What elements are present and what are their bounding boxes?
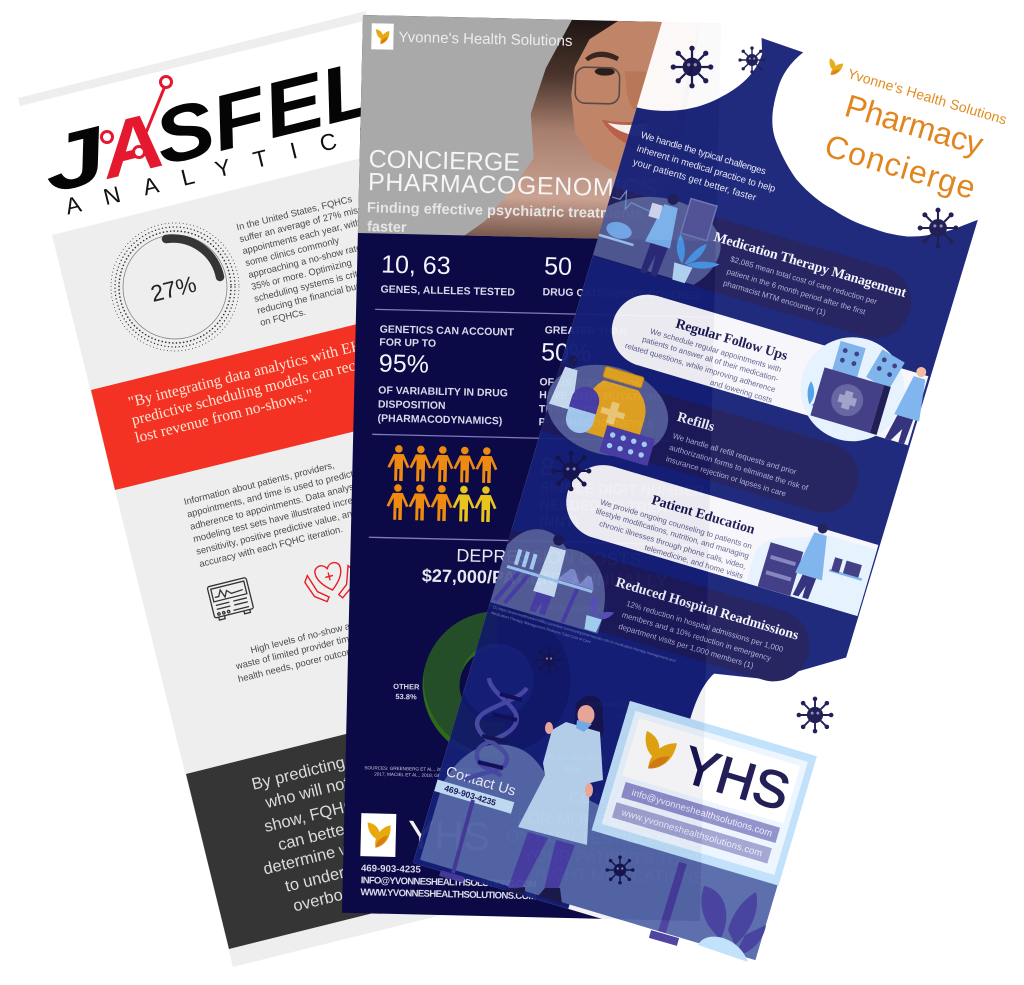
description: (PHARMACODYNAMICS) bbox=[377, 412, 503, 427]
panel: refills bbox=[535, 351, 870, 527]
sign frame bbox=[592, 701, 817, 886]
doctor head bbox=[567, 354, 579, 367]
icon: DNA helix bbox=[465, 678, 527, 780]
plant pot bbox=[669, 262, 692, 284]
yellow people bbox=[452, 485, 497, 522]
donut ghost bbox=[429, 612, 566, 749]
blue background shape bbox=[413, 10, 1010, 965]
phone number: 469-903-4235 bbox=[443, 783, 497, 808]
table top bbox=[507, 566, 592, 592]
label: DRUG CATEGORIES COVERED bbox=[542, 286, 700, 302]
value: 8 bbox=[540, 453, 555, 482]
lead: FOR UP TO bbox=[379, 336, 436, 350]
cabinet drawers bbox=[766, 557, 795, 580]
subtitle: faster bbox=[367, 219, 407, 236]
pill background bbox=[541, 363, 867, 521]
eye bbox=[595, 67, 615, 76]
intro paragraph: on FQHCs. bbox=[259, 306, 307, 328]
call to action: RIGHT MEDICATIONS bbox=[535, 865, 705, 887]
blob bbox=[593, 183, 730, 289]
heading: Regular Follow Ups bbox=[674, 317, 790, 364]
intro text: We handle the typical challenges bbox=[639, 130, 767, 177]
description: We handle all refill requests and prior bbox=[672, 431, 798, 477]
cabinet bbox=[758, 542, 803, 596]
flyer: Concierge Pharmacogenomics bbox=[342, 15, 755, 922]
lead: GREATER THAN bbox=[545, 324, 627, 338]
bottle body bbox=[579, 377, 652, 447]
icon: heart in hands bbox=[302, 558, 359, 606]
teeth bbox=[608, 122, 646, 136]
progress arc bbox=[166, 238, 220, 277]
stat: single digit NNT bbox=[539, 453, 706, 534]
illustration: lab bbox=[490, 521, 631, 637]
sign inner panel bbox=[602, 711, 808, 875]
blister pack left bbox=[832, 341, 866, 379]
illustration: consulting doctor bbox=[746, 507, 880, 616]
board bbox=[681, 199, 717, 241]
doctor head bbox=[552, 533, 565, 547]
doctor coat bbox=[533, 545, 568, 597]
doctor legs bbox=[885, 411, 914, 445]
description: patients to answer all of their medication- bbox=[641, 335, 780, 384]
bar bbox=[434, 779, 514, 814]
description: members and a 10% reduction in emergency bbox=[621, 610, 772, 663]
plant leaves bbox=[672, 234, 725, 274]
description: HAVE GENE MUTATIONS bbox=[539, 389, 664, 404]
icon: virus left bbox=[535, 646, 563, 674]
sign logo area bbox=[622, 718, 800, 823]
donut chart bbox=[440, 629, 553, 742]
donut labels: hidden segments: PHARMACEUTICALS bbox=[586, 699, 662, 710]
description: 12% reduction in hospital admissions per 1,000 bbox=[625, 599, 785, 654]
data paragraph: adherence to appointments. Data analysis bbox=[189, 479, 362, 532]
value: 50 bbox=[544, 252, 572, 281]
icon: virus mid left bbox=[551, 451, 591, 491]
mouth bbox=[602, 120, 632, 144]
flyer gray body bbox=[52, 136, 450, 967]
donut labels: hidden segments: 16% bbox=[616, 711, 632, 720]
doctor legs bbox=[793, 572, 817, 600]
footer logo badge bbox=[360, 813, 396, 857]
panel: patient education bbox=[557, 451, 880, 616]
main title: PHARMACOGENOMICS bbox=[368, 168, 657, 203]
doctor head bbox=[915, 366, 927, 378]
sign YHS: YHS bbox=[676, 736, 796, 822]
doctor coat bbox=[549, 365, 583, 410]
intro paragraph: some clinics commonly bbox=[244, 234, 341, 268]
label: GENES, ALLELES TESTED bbox=[380, 283, 515, 299]
dotted ring bbox=[111, 223, 239, 351]
logo letters SFEL: SFEL bbox=[145, 43, 384, 182]
description: We schedule regular appointments with bbox=[649, 327, 782, 374]
sources: 2017; MACIEL ET AL., 2018; GROUP bbox=[374, 771, 451, 778]
stand pole bbox=[453, 800, 473, 873]
blister pack bbox=[599, 425, 655, 466]
donut label: other: OTHER bbox=[393, 682, 420, 692]
illustration: doctor at desk bbox=[592, 176, 735, 293]
intro paragraph: 35% or more. Optimizing bbox=[250, 257, 353, 292]
data paragraph: appointments, and time is used to predict bbox=[186, 468, 355, 519]
call to action: YOUR PATIENTS TO THE bbox=[523, 847, 718, 870]
photo: woman portrait bbox=[464, 20, 662, 239]
plant bottom right bbox=[698, 886, 766, 962]
description: related questions, while improving adherence bbox=[624, 341, 776, 394]
closing statement: can better bbox=[276, 819, 352, 854]
intro paragraph: approaching a no-show rate of bbox=[247, 239, 373, 280]
description: and lowering costs bbox=[709, 378, 773, 405]
doctor head bbox=[666, 193, 680, 206]
hill bbox=[420, 730, 794, 960]
pill background bbox=[491, 530, 818, 690]
bottle cap bbox=[603, 366, 644, 388]
left leg bbox=[508, 832, 548, 888]
value: 10, 63 bbox=[381, 250, 451, 280]
intro paragraph: scheduling systems is critical to bbox=[253, 262, 382, 304]
heading: Medication Therapy Management bbox=[712, 230, 908, 301]
capsule lower half bbox=[562, 406, 596, 436]
other segment bbox=[440, 629, 511, 741]
box emblem bbox=[827, 380, 867, 420]
footnote: Medication Therapy Management Reduces Total Cost of Care bbox=[491, 611, 591, 644]
brand row bbox=[825, 58, 1009, 128]
description: NEEDED TO TREAT bbox=[539, 497, 675, 516]
coat bbox=[518, 722, 603, 845]
sign board bbox=[592, 701, 817, 886]
capsule upper half bbox=[569, 383, 603, 414]
no-show paragraph: health needs, poorer outcomes bbox=[237, 642, 365, 684]
stat: greater than 50% bbox=[538, 324, 666, 431]
donut label: other: 53.8% bbox=[395, 692, 417, 701]
orange people bbox=[386, 445, 498, 522]
call to action: FOR MORE INFORMATION bbox=[517, 810, 725, 833]
no-show paragraph: waste of limited provider time, unaddressed bbox=[234, 617, 413, 672]
heading: Refills bbox=[675, 410, 717, 435]
stand base bbox=[440, 873, 464, 880]
quote text: lost revenue from no-shows." bbox=[133, 386, 315, 447]
sign post bbox=[650, 863, 683, 942]
badge box bbox=[360, 813, 396, 857]
call to action: CONTACT US bbox=[569, 789, 675, 809]
description: PHARMACOGENETICS bbox=[538, 416, 654, 431]
quote text: "By integrating data analytics with EHRs and bbox=[127, 327, 405, 411]
red quote band bbox=[91, 301, 450, 490]
description: (NNT) bbox=[539, 514, 579, 531]
header logo badge bbox=[371, 23, 394, 50]
blob bbox=[746, 517, 877, 616]
pill background bbox=[593, 187, 920, 347]
closing statement: to underbook or bbox=[283, 850, 400, 896]
Jasfel logo bbox=[33, 43, 384, 220]
chair bbox=[604, 219, 634, 242]
doctor coat bbox=[645, 202, 682, 249]
tablet bbox=[843, 561, 862, 578]
helix strand two bbox=[465, 688, 527, 780]
face bbox=[571, 21, 662, 173]
collar bbox=[576, 720, 592, 732]
hair bbox=[574, 696, 604, 738]
quote text: predictive scheduling models can recapture bbox=[130, 348, 395, 429]
panel: reduced hospital readmissions bbox=[490, 521, 821, 693]
pictogram: people bbox=[386, 445, 498, 522]
blob bbox=[490, 521, 622, 634]
data paragraph: sensitivity, positive predictive value, and bbox=[195, 506, 358, 557]
brand name: Yvonne's Health Solutions bbox=[398, 29, 573, 50]
main title: CONCIERGE bbox=[368, 145, 520, 177]
lead: GENETICS CAN ACCOUNT bbox=[380, 323, 515, 339]
description: We provide ongoing counseling to patients on bbox=[599, 497, 753, 551]
pot bbox=[583, 615, 602, 633]
box side bbox=[870, 385, 891, 435]
badge leaf bbox=[376, 29, 389, 44]
description: pharmacist MTM encounter (1) bbox=[722, 278, 827, 317]
doctor coat bbox=[795, 530, 834, 580]
shoes bbox=[503, 887, 562, 904]
illustration: medicine box bbox=[788, 325, 937, 460]
panel: medication therapy management bbox=[592, 176, 923, 349]
doctor legs bbox=[529, 588, 553, 616]
blister dots bbox=[606, 432, 648, 458]
intro paragraph: In the United States, FQHCs bbox=[235, 193, 353, 232]
doctor head bbox=[817, 522, 829, 535]
icon: virus lower right bbox=[797, 697, 833, 733]
description: SINGLE DIGIT NUMBER bbox=[540, 480, 705, 500]
closing statement: By predicting patients bbox=[250, 738, 407, 794]
hair bbox=[464, 20, 658, 239]
face bbox=[578, 705, 594, 725]
eyebrow bbox=[585, 51, 619, 62]
title: Concierge bbox=[821, 127, 980, 206]
plant bbox=[587, 594, 618, 623]
footnote: (1) https://www.healthstakeholder.com/view-community/pharmacists-role-in-medication-therapy-management-and bbox=[492, 605, 676, 663]
description: authorization forms to eliminate the risk of bbox=[668, 443, 810, 493]
value: 50% bbox=[541, 338, 592, 367]
heartbeat line bbox=[610, 187, 659, 218]
percent value: 27% bbox=[148, 271, 199, 307]
flyer: Pharmacy Concierge bbox=[388, 0, 1012, 965]
bottle bbox=[831, 557, 843, 573]
description: department visits per 1,000 members (1) bbox=[617, 622, 755, 670]
logo circuit nodes bbox=[102, 76, 172, 158]
footer YHS: YHS bbox=[407, 813, 491, 859]
pot bbox=[698, 937, 748, 962]
icon: virus bottom bbox=[605, 855, 635, 885]
website bar bbox=[612, 802, 772, 864]
badge leaf bbox=[367, 822, 391, 848]
data paragraph: modeling test sets have illustrated increased bbox=[192, 489, 374, 544]
intro paragraph: reducing the financial burden bbox=[256, 276, 375, 316]
right leg bbox=[544, 840, 575, 890]
hand raised bbox=[545, 722, 553, 734]
hand lower bbox=[585, 783, 593, 797]
contact details: 469-903-4235 bbox=[361, 863, 422, 876]
email bar bbox=[621, 782, 780, 843]
leaf bbox=[826, 58, 844, 77]
description: telemedicine, and home visits bbox=[644, 543, 744, 581]
data paragraph: accuracy with each FQHC iteration. bbox=[198, 523, 344, 569]
dark closing band bbox=[186, 708, 450, 949]
closing statement: show, FQHCs bbox=[262, 794, 365, 836]
logo letter J: J bbox=[33, 109, 116, 210]
description: OF VARIABILITY IN DRUG bbox=[378, 384, 508, 399]
depression cost heading: DEPRESSION COSTS bbox=[456, 545, 642, 570]
value: 95% bbox=[379, 349, 429, 379]
bed bbox=[599, 235, 633, 245]
blob bbox=[535, 351, 679, 470]
depression cost heading: $27,000/PATIENT ANNUALLY bbox=[422, 566, 668, 591]
clipboard bbox=[648, 203, 663, 219]
test tubes bbox=[516, 549, 536, 569]
description: patient in the 6 month period after the first bbox=[726, 267, 867, 317]
contact details: WWW.YVONNESHEALTHSOLUTIONS.COM bbox=[360, 887, 537, 902]
closing statement: who will not bbox=[263, 774, 351, 812]
sign leaf bbox=[637, 731, 678, 774]
stat: genes bbox=[380, 250, 516, 299]
donut labels: hidden segments: MEDICAL SERVICES bbox=[534, 603, 608, 614]
heading: Patient Education bbox=[650, 493, 757, 538]
illustration: woman in lab coat bbox=[440, 696, 604, 904]
thin ring bbox=[123, 235, 227, 339]
stat ring 27% bbox=[111, 223, 239, 351]
blister dots right bbox=[876, 357, 898, 378]
blister pack right bbox=[866, 349, 905, 390]
doctor coat bbox=[894, 374, 931, 421]
panel: regular follow ups bbox=[599, 269, 937, 460]
description: $2,085 mean total cost of care reduction per bbox=[729, 254, 879, 306]
pill background bbox=[557, 456, 878, 616]
subtitle: Finding effective psychiatric treatments bbox=[367, 200, 643, 223]
donut labels: hidden segments: SUICIDE-RELATED bbox=[539, 752, 607, 763]
description: DISPOSITION bbox=[378, 398, 446, 412]
intro text: your patients get better, faster bbox=[631, 157, 757, 204]
glasses bbox=[575, 67, 620, 104]
description: THAT ALTER bbox=[539, 403, 603, 417]
description: chronic illnesses through phone calls, video, bbox=[598, 519, 747, 571]
stat: genetics 95% bbox=[377, 323, 515, 428]
description: OF US POPULATION bbox=[539, 376, 643, 391]
blob bbox=[788, 325, 917, 454]
flyer top gray strip bbox=[18, 11, 368, 106]
leaves bbox=[701, 886, 766, 955]
stat: drug categories bbox=[542, 252, 701, 302]
data paragraph: Information about patients, providers, bbox=[183, 459, 335, 507]
pill background bbox=[603, 286, 928, 445]
title: Pharmacy bbox=[841, 87, 987, 162]
heading: Reduced Hospital Readmissions bbox=[614, 575, 801, 644]
icon: virus top left bbox=[671, 46, 713, 88]
contact heading: Contact Us bbox=[444, 764, 518, 800]
closing statement: determine when bbox=[262, 833, 380, 878]
bottle cross bbox=[598, 399, 628, 427]
table legs bbox=[494, 566, 578, 624]
flasks bbox=[557, 566, 598, 590]
description: insurance rejection or lapses in care bbox=[665, 454, 787, 498]
box cross bbox=[836, 389, 858, 411]
icon: virus title bbox=[918, 208, 958, 248]
description: lifestyle modifications, nutrition, and managing bbox=[595, 507, 750, 560]
gray header bbox=[358, 15, 721, 241]
side table bbox=[829, 570, 862, 580]
navy body bbox=[342, 15, 721, 921]
donut labels: hidden segments: 9.4% bbox=[564, 764, 581, 773]
illustration: medicine bottle bbox=[535, 351, 679, 470]
logo word ANALYTICS: ANALYTICS bbox=[63, 118, 377, 220]
flyer: Jasfel Analytics bbox=[18, 11, 450, 967]
logo red letter A: A bbox=[89, 95, 172, 196]
brand name: Yvonne's Health Solutions bbox=[846, 65, 1009, 128]
website text: www.yvonneshealthsolutions.com bbox=[620, 806, 764, 858]
helix rungs bbox=[478, 694, 522, 768]
helix strand one bbox=[477, 678, 517, 776]
sources: SOURCES: GREENBERG ET AL., 2015; SOURCES LISTED bbox=[364, 765, 490, 773]
call to action: ON HOW TESTING MATCHES bbox=[506, 828, 736, 851]
intro text: inherent in medical practice to help bbox=[635, 143, 777, 195]
contact details: INFO@YVONNESHEALTHSOLUTIONS.COM bbox=[361, 875, 537, 890]
doctor legs bbox=[640, 239, 669, 278]
remaining segment bbox=[495, 630, 553, 741]
closing statement: overbook bbox=[291, 881, 362, 915]
box bbox=[810, 367, 884, 433]
plant bbox=[804, 381, 835, 410]
badge box bbox=[371, 23, 394, 50]
blister dots left bbox=[839, 348, 860, 367]
icon: virus top small bbox=[738, 46, 766, 74]
phone bar bbox=[434, 779, 514, 814]
nose bbox=[625, 71, 647, 109]
icon: monitor bbox=[207, 577, 254, 621]
no-show paragraph: High levels of no-show appointments result bbox=[249, 602, 426, 655]
intro paragraph: suffer an average of 27% missed bbox=[238, 201, 374, 244]
intro paragraph: appointments each year, with bbox=[241, 216, 362, 256]
email text: info@yvonneshealthsolutions.com bbox=[631, 786, 774, 839]
flyer paper bbox=[413, 7, 1010, 965]
